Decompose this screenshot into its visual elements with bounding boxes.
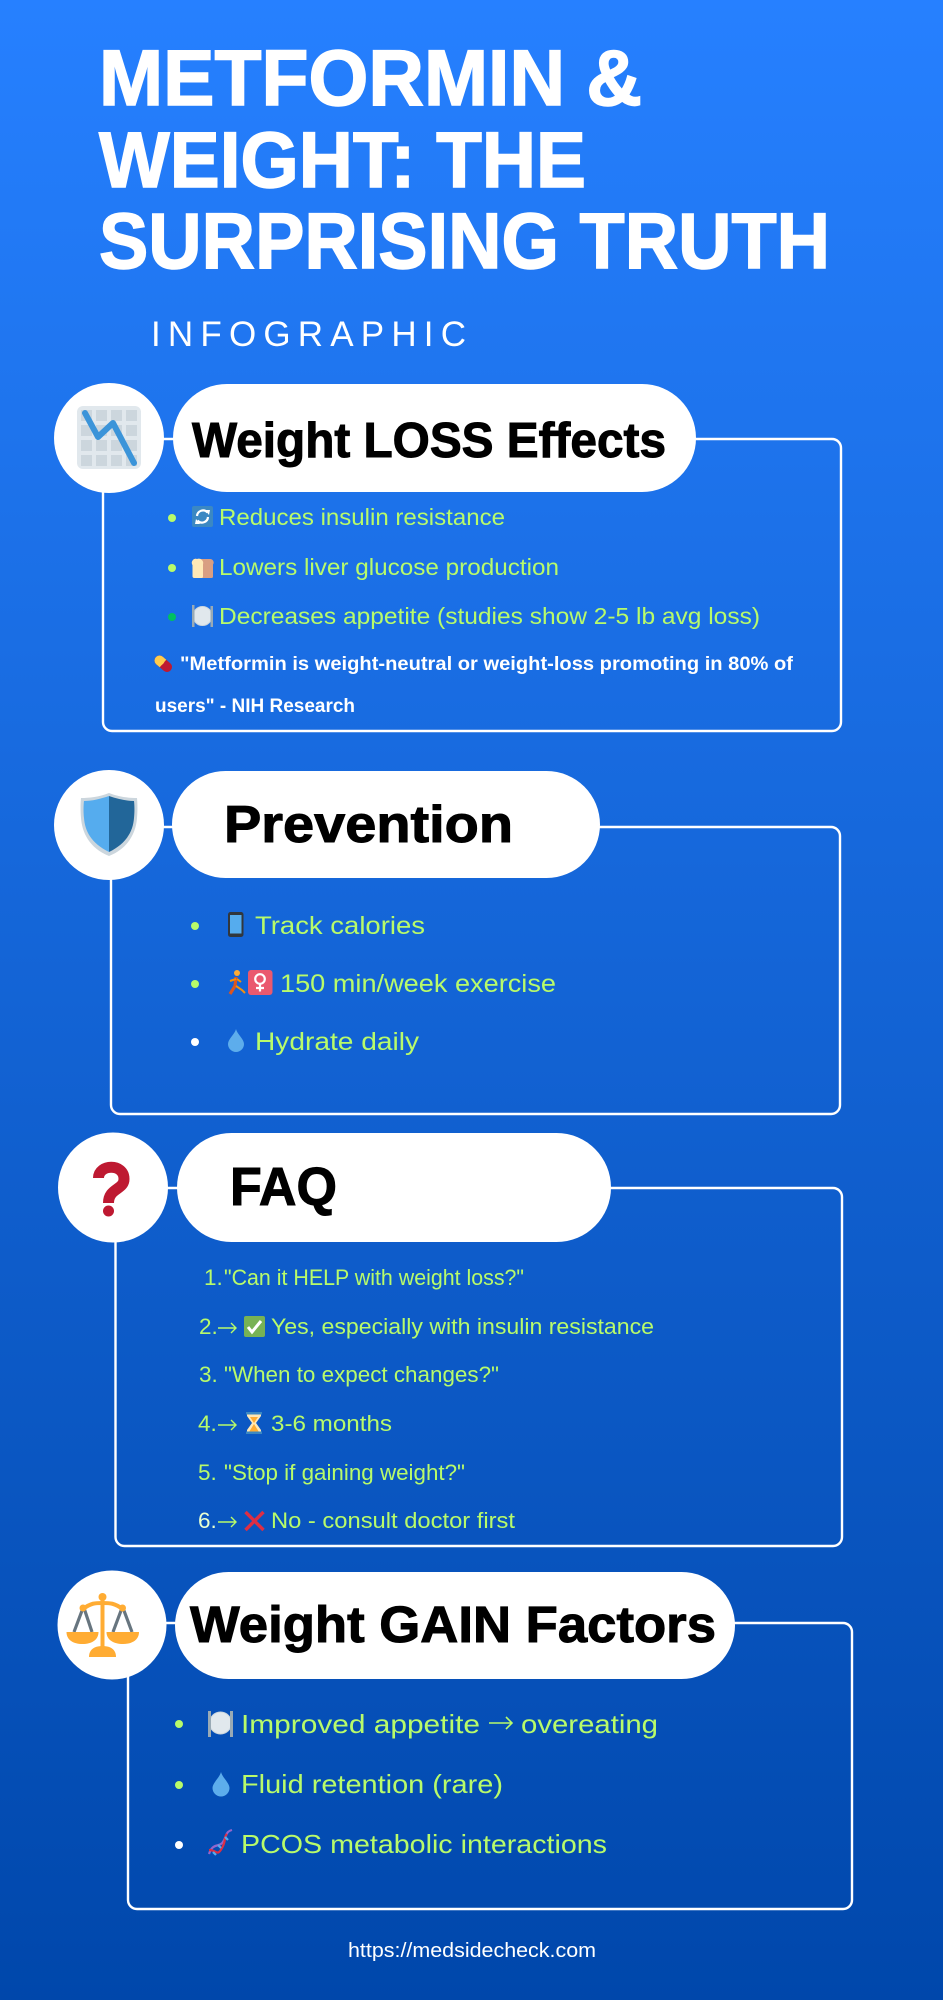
heading pill: Prevention [224,796,513,854]
bullet: lowers liver glucose production: Lowers liver glucose production [219,554,559,580]
heading pill [177,1133,611,1242]
bullet: hydrate: Hydrate daily [255,1028,420,1056]
quote: "Metformin is weight-neutral or weight-loss promoting in 80% of [180,654,794,675]
bullet: track calories [191,912,425,940]
bullet: PCOS: PCOS metabolic interactions [241,1829,607,1859]
icon: balance scale [58,1570,166,1680]
item 1: "Can it HELP with weight loss?" [224,1265,524,1290]
icon: female sign [248,970,272,995]
title: SURPRISING TRUTH [99,196,830,285]
icon: dna [209,1830,232,1855]
footer url: https://medsidecheck.com [348,1940,596,1962]
bullet: exercise [191,970,556,998]
bullet: improved appetite [175,1709,658,1739]
item 5: 5. [198,1460,217,1485]
title [99,33,830,285]
item 4: 3-6 months [271,1411,392,1436]
item 2: Yes, especially with insulin resistance [271,1314,654,1339]
bullet: decreases appetite: Decreases appetite (studies show 2-5 lb avg loss) [219,603,760,629]
bullet: improved appetite: Improved appetite [241,1709,480,1739]
panel: weight loss effects [54,383,841,731]
bullet: hydrate [191,1028,420,1056]
bullet: track calories: Track calories [255,912,425,940]
panel: prevention [54,770,840,1114]
item 1: 1. [204,1265,223,1290]
heading pill: FAQ [230,1157,337,1217]
heading pill [173,384,696,492]
heading pill [172,771,600,878]
item 2: 2. [199,1314,218,1339]
subtitle: INFOGRAPHIC [151,315,466,354]
item 4: 4. [198,1411,217,1436]
bullet: exercise: 150 min/week exercise [280,970,556,998]
item 3: 3. [199,1362,218,1387]
FAQ list [198,1265,654,1533]
quote [154,654,794,717]
heading pill: Weight LOSS Effects [192,414,666,468]
panel: weight gain factors [58,1570,852,1909]
icon: runner [230,970,245,994]
panel outline [116,1188,842,1546]
title: METFORMIN & [99,33,642,122]
item 5: "Stop if gaining weight?" [224,1460,465,1485]
icon: shield [54,770,164,880]
panel: FAQ [58,1132,842,1546]
item 6: 6. [198,1508,217,1533]
icon: chart decreasing [54,383,164,493]
panel outline [103,439,841,731]
icon: pill [154,656,167,667]
bullet: improved appetite: overeating [521,1709,658,1739]
item 3: "When to expect changes?" [224,1362,499,1387]
heading pill [175,1572,735,1679]
item 6: No - consult doctor first [271,1508,516,1533]
title: WEIGHT: THE [99,115,586,204]
heading pill: Weight GAIN Factors [190,1596,716,1653]
bullet: fluid retention: Fluid retention (rare) [241,1769,503,1799]
panel outline [111,827,840,1114]
item 4 [198,1411,392,1436]
bullet: reduces insulin resistance: Reduces insulin resistance [219,504,505,530]
icon: question mark [58,1132,168,1242]
quote: users" - NIH Research [155,696,355,717]
panel outline [128,1623,852,1909]
